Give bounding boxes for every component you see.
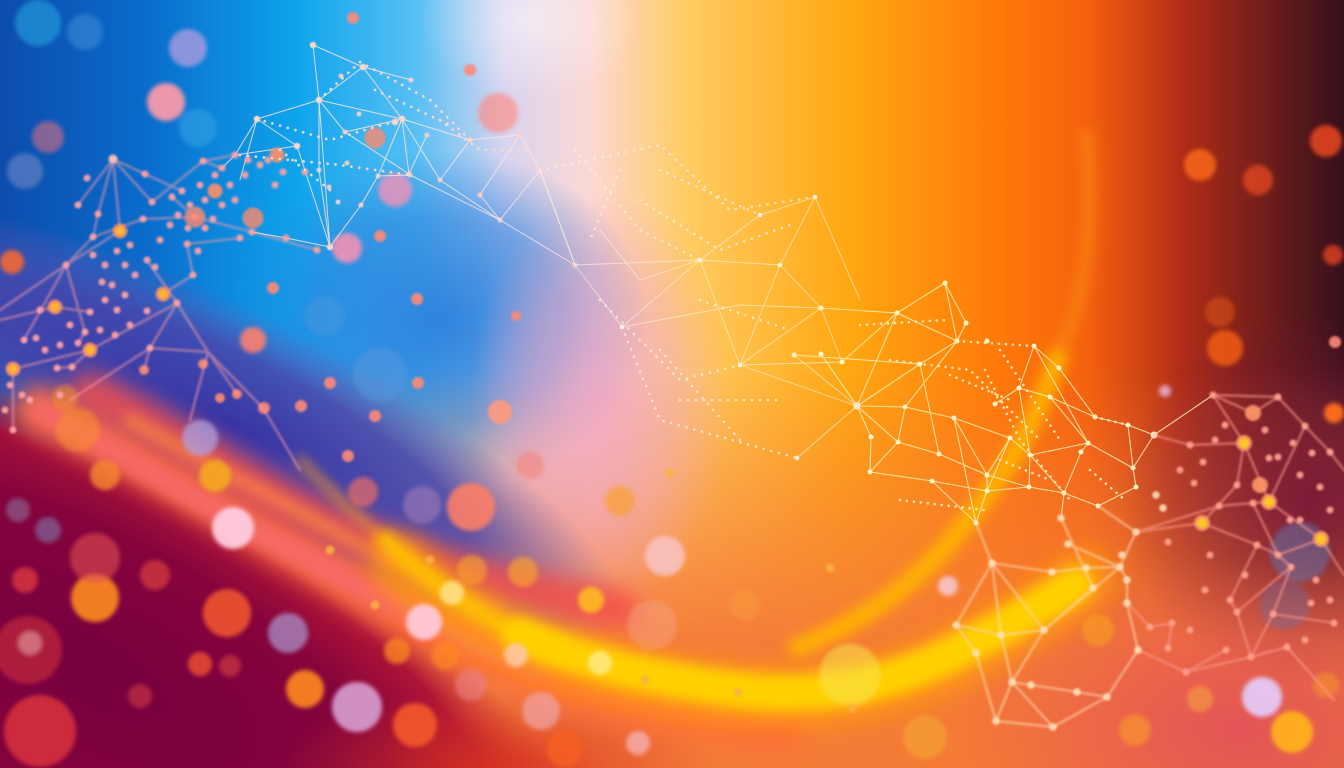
network lines: upper left, soft [0,155,317,470]
network nodes: lower right crisp [794,283,1136,523]
bokeh: small sharp dots [144,18,1335,708]
network lines: lower right crisp [794,283,1213,523]
network lines: lower right soft [956,506,1138,727]
network lines: upper left, crisp [222,45,575,265]
network nodes: lower right soft, pale [956,495,1163,727]
swoosh: thick yellow band [385,540,1085,698]
network: lower right soft cluster [956,395,1344,727]
network: upper left cluster [0,45,575,470]
network nodes: upper left, bright [257,45,402,247]
network: lower right crisp cluster [794,283,1213,523]
network: centre cluster [540,145,860,458]
network nodes: centre [622,197,815,458]
ribbons: red and orange light streaks [40,392,780,725]
network nodes: upper left, orange core [13,155,277,369]
network nodes: lower right soft, orange core [1202,413,1321,539]
network nodes: upper left, blurred pink [5,155,317,430]
network nodes: lower right soft, warm [1150,395,1334,672]
arc: thin orange-yellow curve [790,130,1090,650]
network lines: centre [540,170,860,458]
